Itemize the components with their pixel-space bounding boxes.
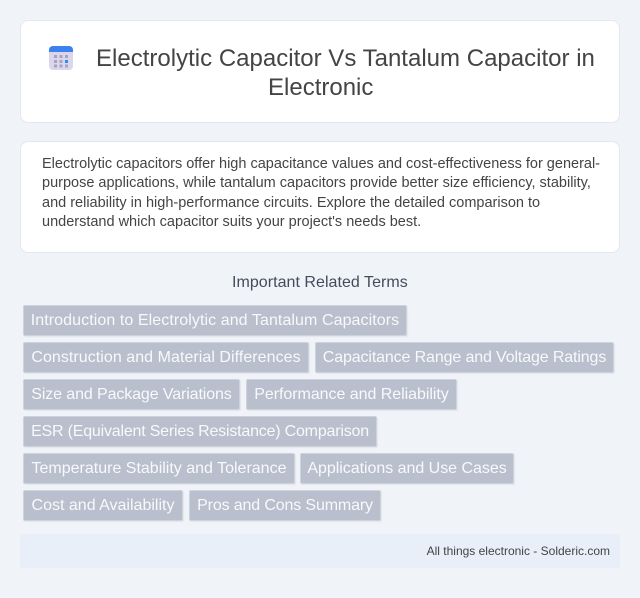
description text: purpose applications, while tantalum capacitors provide better size efficiency, stability, — [42, 175, 591, 191]
tag — [246, 379, 457, 410]
description text: and reliability in high-performance circuits. Explore the detailed comparison to — [42, 194, 540, 210]
title second line: Electronic — [268, 74, 373, 101]
tag: ESR (Equivalent Series Resistance) Comparison — [31, 423, 369, 440]
panel: title card — [20, 20, 620, 123]
tag: Cost and Availability — [32, 497, 174, 514]
tag: Applications and Use Cases — [307, 460, 507, 477]
tag — [23, 453, 295, 484]
tag — [23, 416, 377, 447]
description text: understand which capacitor suits your project's needs best. — [42, 214, 421, 230]
tag: Introduction to Electrolytic and Tantalum Capacitors — [31, 312, 399, 329]
description text — [42, 156, 600, 230]
tag: Size and Package Variations — [31, 386, 232, 403]
description text: Electrolytic capacitors offer high capacitance values and cost-effectiveness for general- — [42, 156, 600, 172]
tag — [23, 305, 407, 336]
icon: calendar grid — [49, 46, 73, 70]
heading: important related terms: Important Related Terms — [232, 274, 408, 291]
tag: Pros and Cons Summary — [197, 497, 373, 514]
tag: Performance and Reliability — [254, 386, 449, 403]
tag — [23, 379, 240, 410]
tag: Construction and Material Differences — [31, 349, 301, 366]
tag — [300, 453, 514, 484]
tag — [23, 342, 309, 373]
tag: Temperature Stability and Tolerance — [32, 460, 286, 477]
tag — [23, 490, 183, 521]
tag — [315, 342, 614, 373]
tag: Capacitance Range and Voltage Ratings — [323, 349, 606, 366]
tag — [189, 490, 381, 521]
title: Electrolytic Capacitor Vs Tantalum Capacitor in — [96, 45, 595, 72]
footer bar — [20, 534, 620, 568]
footer text: All things electronic - Solderic.com — [427, 544, 610, 558]
panel: description card — [20, 141, 620, 253]
